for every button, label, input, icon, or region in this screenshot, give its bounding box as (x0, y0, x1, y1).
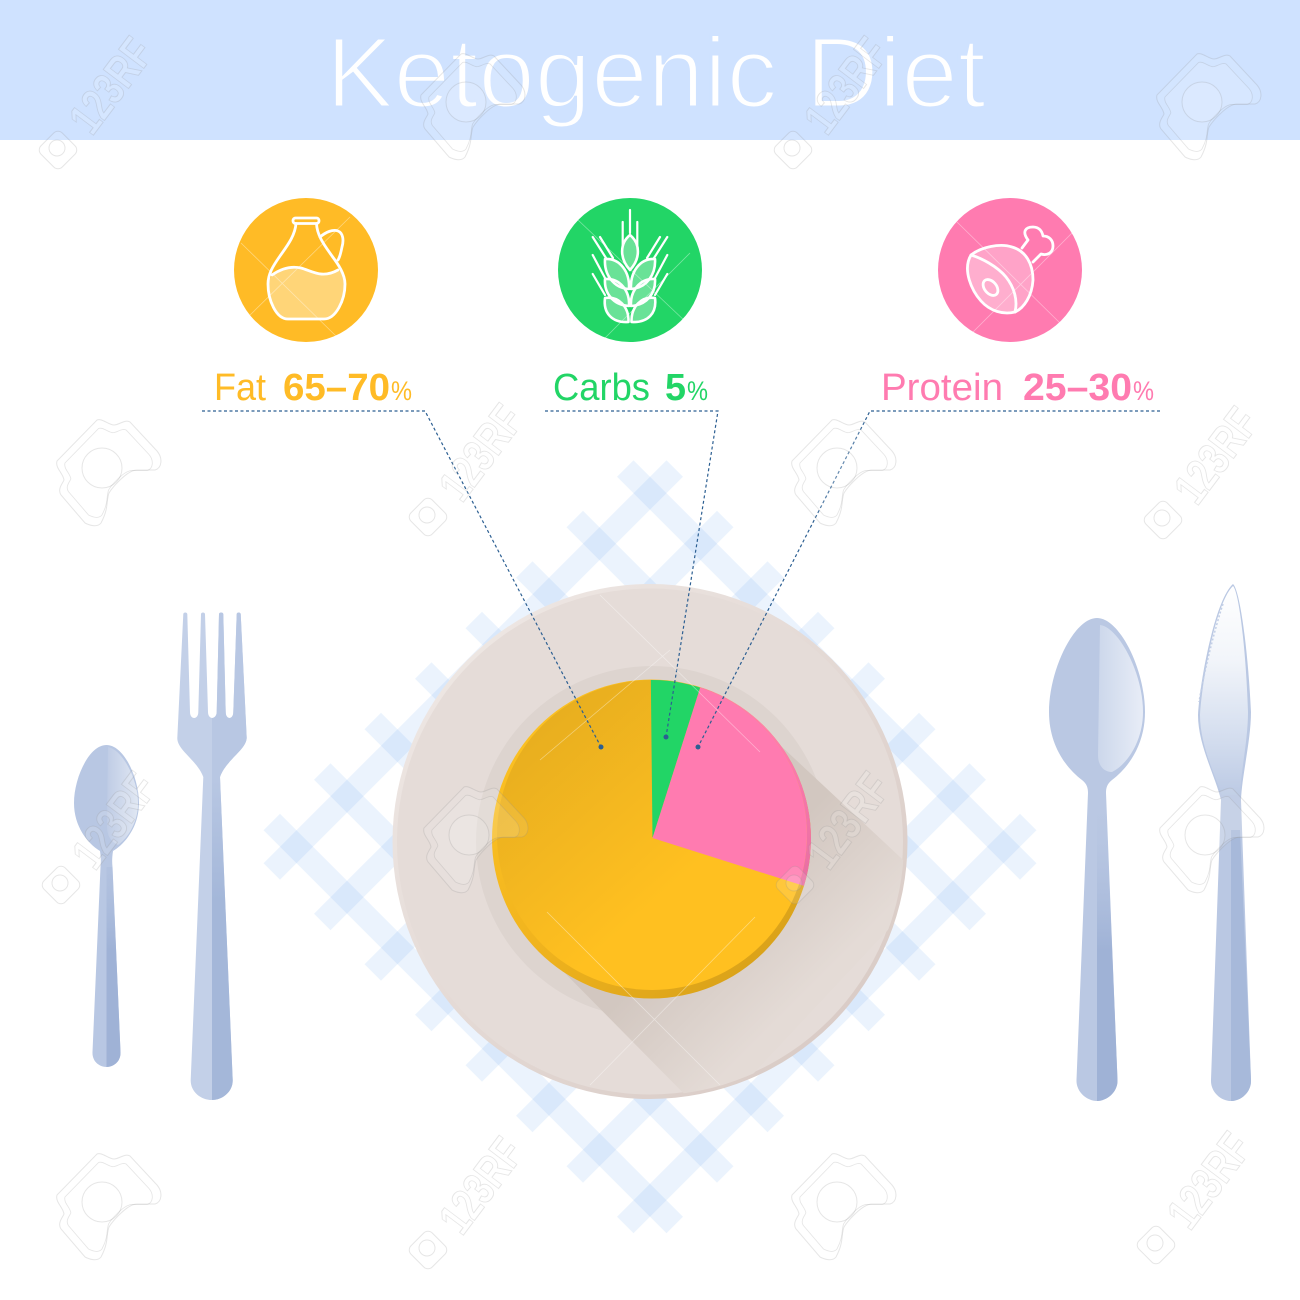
pie chart (492, 680, 811, 998)
label: carbs (553, 367, 708, 409)
fat value: 65–70 (283, 367, 390, 409)
protein percent sign: % (1133, 376, 1154, 406)
plate (392, 584, 930, 1120)
protein value: 25–30 (1023, 367, 1132, 409)
long shadow (565, 747, 902, 1093)
icon: ham (938, 198, 1082, 342)
plate well (476, 666, 828, 1018)
label: protein (881, 367, 1154, 409)
tablecloth (247, 444, 1053, 1250)
watermark text: 123RF (61, 763, 166, 878)
fat percent sign: % (391, 376, 412, 406)
watermark text: 123RF (795, 763, 900, 878)
label: protein: Protein (881, 367, 1003, 409)
carbs percent sign: % (687, 376, 708, 406)
icon: oil jug (234, 198, 378, 342)
leader line: protein (696, 411, 1160, 750)
watermark text: 123RF (58, 28, 163, 143)
knife (1198, 584, 1251, 1101)
watermark text: 123RF (428, 1128, 533, 1243)
watermark text: 123RF (793, 28, 898, 143)
label: fat (214, 367, 412, 409)
header banner (0, 0, 1300, 140)
leader line: fat (202, 411, 604, 750)
fork (177, 612, 247, 1100)
pie slice: carbs (650, 680, 700, 838)
watermark small logos (37, 129, 1184, 1271)
watermark text: 123RF (1163, 398, 1268, 513)
pie slice: protein (652, 688, 807, 884)
label: fat: Fat (214, 367, 266, 409)
knife serration (1199, 604, 1223, 702)
carbs value: 5 (665, 367, 686, 409)
large spoon (1049, 618, 1145, 1101)
small spoon (74, 745, 139, 1067)
icon: wheat (558, 198, 702, 342)
watermark text: 123RF (1156, 1123, 1261, 1238)
title: Ketogenic Diet (326, 17, 986, 129)
pie slice: fat (497, 680, 807, 990)
watermark scratch lines (241, 217, 1072, 1085)
watermark text: 123RF (428, 395, 533, 510)
label: carbs: Carbs (553, 367, 650, 409)
leader line: carbs (545, 411, 718, 740)
